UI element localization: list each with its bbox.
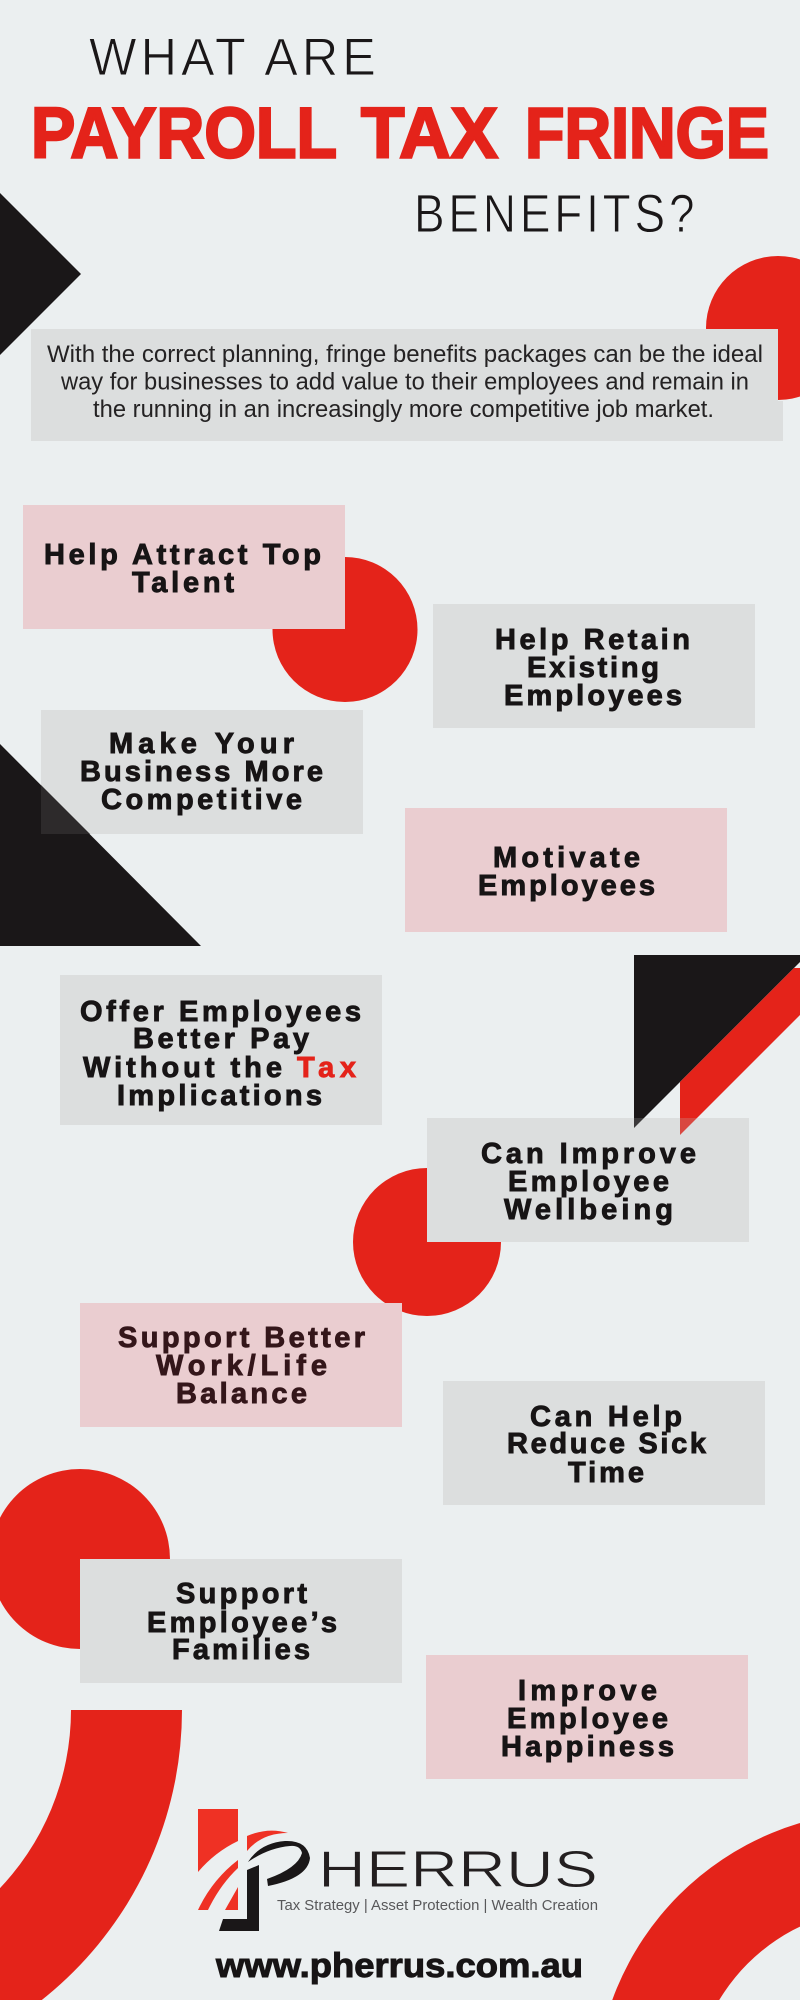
card: Help Retain Existing Employees: Existing (527, 652, 659, 684)
card: Improve Employee Happiness (426, 1655, 748, 1779)
card: Can Improve Employee Wellbeing: Employee (508, 1166, 669, 1198)
card: Support Better Work/Life Balance: Balance (176, 1378, 307, 1410)
card: Motivate Employees: Employees (478, 870, 655, 902)
title line: Benefits?: BENEFITS? (414, 184, 695, 244)
intro text (47, 341, 763, 423)
card: Make Your Business More Competitive: Make Your (109, 728, 294, 760)
title line: Payroll Tax Fringe: PAYROLL (31, 94, 337, 174)
logo wordmark: HERRUS (318, 1841, 598, 1899)
title line: Payroll Tax Fringe: FRINGE (525, 94, 769, 174)
card: Make Your Business More Competitive: Business More (80, 756, 323, 788)
card: Support Employee's Families (80, 1559, 402, 1683)
red arc bottom right (595, 1811, 800, 2000)
card: Improve Employee Happiness: Improve (518, 1675, 657, 1707)
black triangle top left (0, 193, 81, 355)
card: Make Your Business More Competitive: Competitive (101, 784, 302, 816)
red circle middle (353, 1168, 501, 1316)
website url: www.pherrus.com.au (215, 1947, 583, 1985)
card: Can Help Reduce Sick Time (443, 1381, 765, 1505)
card: Offer Employees Better Pay Without the Tax Implications: Without the (83, 1052, 282, 1084)
card: Help Retain Existing Employees: Help Retain (495, 624, 690, 656)
card: Help Attract Top Talent (23, 505, 345, 629)
intro panel (31, 329, 783, 441)
card: Improve Employee Happiness: Happiness (501, 1731, 674, 1763)
intro text: the running in an increasingly more competitive job market. (93, 396, 714, 423)
red circle lower left (0, 1469, 170, 1649)
card: Can Improve Employee Wellbeing (427, 1118, 749, 1242)
card: Can Help Reduce Sick Time: Reduce Sick (507, 1428, 707, 1460)
card: Improve Employee Happiness: Employee (507, 1703, 668, 1735)
card: Motivate Employees (405, 808, 727, 932)
card: Support Employee's Families: Families (172, 1634, 310, 1666)
intro text: With the correct planning, fringe benefits packages can be the ideal (47, 341, 763, 368)
logo icon (198, 1809, 310, 1931)
card: Support Better Work/Life Balance: Support Better (118, 1322, 365, 1354)
card: Offer Employees Better Pay Without the Tax Implications: Better Pay (133, 1023, 309, 1055)
logo tagline: Tax Strategy | Asset Protection | Wealth Creation (277, 1898, 598, 1914)
card: Support Employee's Families: Support (176, 1578, 307, 1610)
title line: What are: WHAT ARE (89, 27, 376, 86)
card: Help Attract Top Talent: Talent (132, 567, 234, 599)
card: Support Employee's Families: Employee’s (147, 1607, 337, 1639)
card: Can Help Reduce Sick Time: Time (568, 1457, 644, 1489)
card: Help Retain Existing Employees (433, 604, 755, 728)
card: Can Improve Employee Wellbeing: Wellbeing (504, 1194, 673, 1226)
card: Can Improve Employee Wellbeing: Can Improve (481, 1138, 696, 1170)
card: Offer Employees Better Pay Without the Tax Implications: Tax (297, 1052, 356, 1084)
card: Help Retain Existing Employees: Employees (504, 680, 682, 712)
title (31, 27, 769, 244)
black triangle right (634, 955, 800, 1128)
title line: Payroll Tax Fringe: TAX (361, 94, 498, 174)
title line: Payroll Tax Fringe (31, 94, 769, 174)
card: Offer Employees Better Pay Without the Tax Implications: Implications (117, 1080, 322, 1112)
card: Make Your Business More Competitive (41, 710, 363, 834)
card: Support Better Work/Life Balance (80, 1303, 402, 1427)
card: Help Attract Top Talent: Help Attract Top (44, 539, 321, 571)
red circle top right (706, 256, 800, 400)
black triangle middle left (0, 744, 201, 946)
red arc bottom left (0, 1710, 182, 2000)
card: Support Better Work/Life Balance: Work/Life (156, 1350, 327, 1382)
logo: Pherrus (198, 1809, 598, 1931)
intro text: way for businesses to add value to their employees and remain in (60, 368, 749, 396)
red circle behind first card (272, 557, 418, 702)
card: Motivate Employees: Motivate (493, 842, 640, 874)
red slanted stripe right (680, 968, 800, 1135)
card: Offer Employees Better Pay Without the Tax Implications: Offer Employees (80, 996, 361, 1028)
card: Offer Employees Better Pay Without the Tax Implications (60, 975, 382, 1125)
card: Can Help Reduce Sick Time: Can Help (530, 1401, 682, 1433)
